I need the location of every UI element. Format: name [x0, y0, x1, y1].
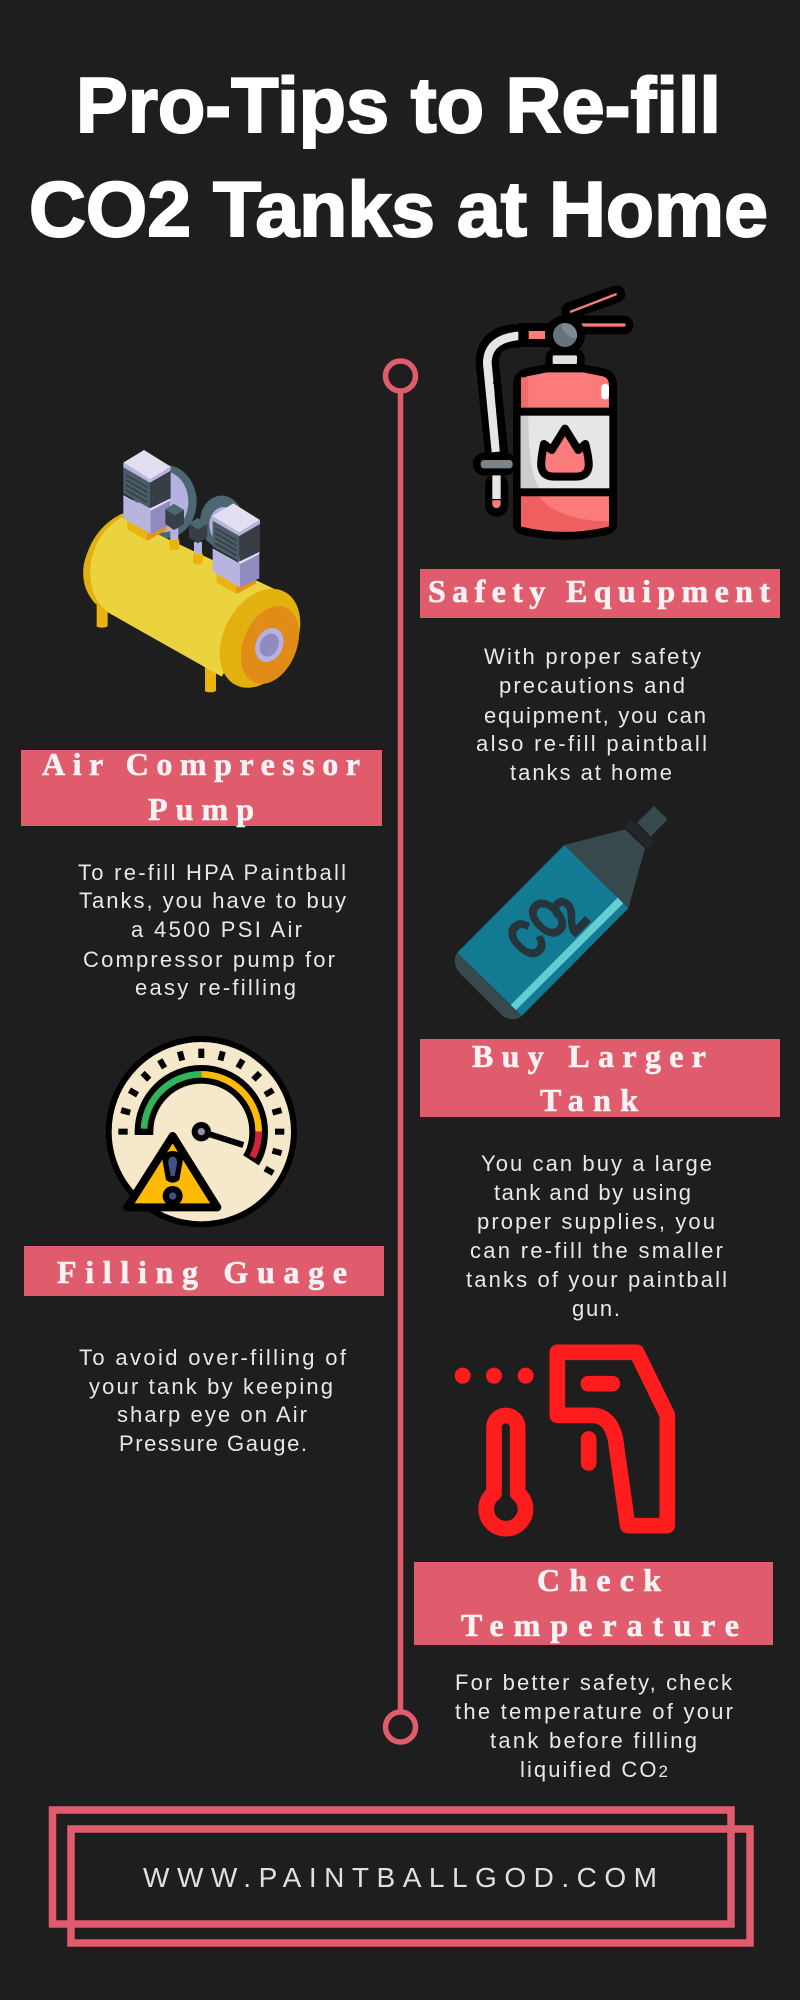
heading: safety equipment	[420, 569, 780, 618]
text: safety equipment	[476, 644, 707, 785]
website url: WWW.PAINTBALLGOD.COM	[143, 1862, 657, 1893]
text: safety equipment: also re-fill paintball	[476, 731, 707, 756]
title: CO2 Tanks at Home	[29, 165, 768, 253]
panel: filling gauge	[24, 1039, 384, 1456]
text: check temperature: liquified CO2	[520, 1757, 668, 1782]
panel: buy larger tank	[420, 806, 780, 1321]
icon: pressure gauge	[109, 1039, 294, 1224]
heading: air compressor pump: Pump	[148, 791, 254, 827]
text: filling guage: sharp eye on Air	[117, 1402, 307, 1427]
text: buy larger tank: can re-fill the smaller	[470, 1238, 723, 1263]
text: check temperature: the temperature of your	[455, 1699, 733, 1724]
text: safety equipment: With proper safety	[484, 644, 701, 669]
icon: infrared thermometer	[455, 1352, 667, 1529]
heading: air compressor pump	[21, 746, 382, 827]
icon: air compressor	[83, 450, 316, 702]
text: buy larger tank	[466, 1151, 727, 1321]
text: filling guage: To avoid over-filling of	[79, 1345, 347, 1370]
title: Pro-Tips to Re-fill	[76, 61, 721, 149]
text: check temperature: For better safety, check	[455, 1670, 733, 1695]
icon: co2 bottle	[455, 806, 668, 1019]
heading: check temperature: Temperature	[461, 1607, 739, 1643]
text: filling guage	[79, 1345, 347, 1456]
heading: buy larger tank	[420, 1038, 780, 1118]
heading: air compressor pump: Air Compressor	[42, 746, 360, 782]
text: air compressor pump: easy re-filling	[135, 975, 296, 1000]
text: check temperature: tank before filling	[490, 1728, 697, 1753]
text: buy larger tank: proper supplies, you	[477, 1209, 715, 1234]
heading: buy larger tank: Buy Larger	[472, 1038, 706, 1074]
heading: filling guage	[24, 1246, 384, 1296]
title	[29, 61, 768, 253]
heading: check temperature	[414, 1562, 773, 1645]
heading: filling guage: Filling Guage	[57, 1254, 347, 1290]
icon: fire extinguisher	[473, 294, 624, 536]
heading: buy larger tank: Tank	[540, 1082, 638, 1118]
text: air compressor pump: To re-fill HPA Paintball	[78, 860, 346, 885]
text: buy larger tank: tanks of your paintball	[466, 1267, 727, 1292]
text: filling guage: Pressure Gauge.	[119, 1431, 307, 1456]
text: air compressor pump: Compressor pump for	[83, 947, 335, 972]
icon: co2 bottle: 2	[539, 885, 599, 946]
text: air compressor pump: Tanks, you have to buy	[79, 888, 346, 913]
heading: safety equipment: Safety Equipment	[428, 573, 770, 609]
text: buy larger tank: tank and by using	[494, 1180, 691, 1205]
footer: website frame	[52, 1810, 750, 1943]
text: check temperature	[455, 1670, 733, 1782]
icon: co2 bottle: CO	[495, 886, 582, 973]
panel: air compressor pump	[21, 450, 382, 1000]
text: safety equipment: tanks at home	[510, 760, 672, 785]
text: safety equipment: equipment, you can	[484, 703, 706, 728]
text: air compressor pump	[78, 860, 346, 1000]
text: buy larger tank: gun.	[572, 1296, 620, 1321]
panel: check temperature	[414, 1352, 773, 1782]
heading: check temperature: Check	[537, 1562, 661, 1598]
panel: safety equipment	[420, 294, 780, 785]
text: buy larger tank: You can buy a large	[481, 1151, 712, 1176]
text: safety equipment: precautions and	[499, 673, 685, 698]
text: filling guage: your tank by keeping	[89, 1374, 333, 1399]
timeline	[386, 361, 416, 1742]
text: air compressor pump: a 4500 PSI Air	[131, 917, 302, 942]
